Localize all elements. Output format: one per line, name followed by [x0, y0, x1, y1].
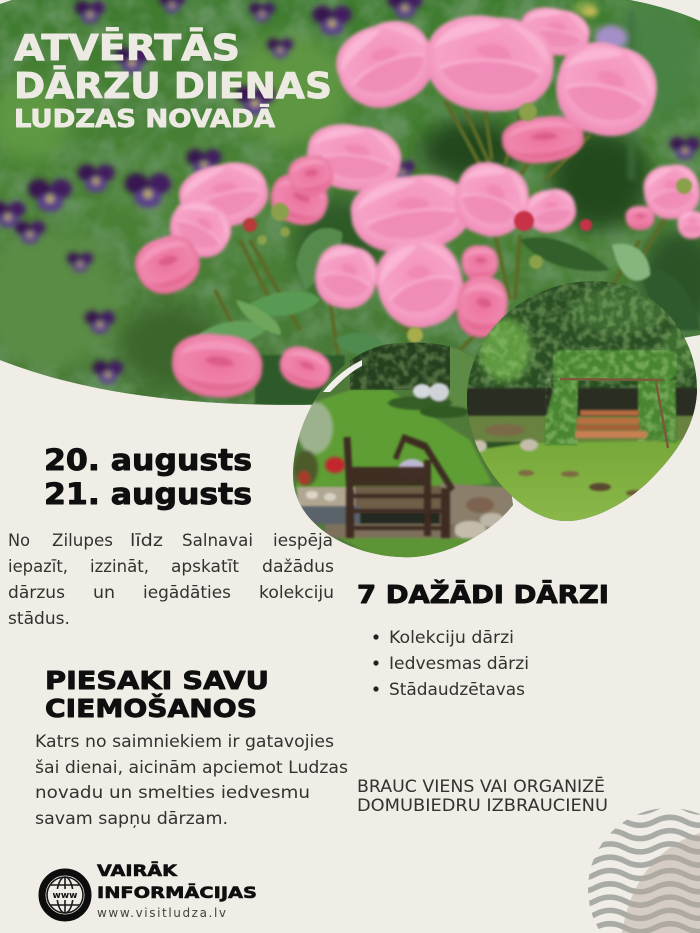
pink roses	[129, 3, 700, 401]
intro text: stādus.	[8, 609, 70, 629]
dates	[44, 443, 252, 511]
decorative wave circle	[565, 804, 700, 933]
rose stems	[215, 100, 670, 370]
garden types list: Iedvesmas dārzi	[389, 654, 529, 674]
heading: sign up for a visit	[45, 666, 269, 723]
dates: 21. augusts	[44, 477, 252, 511]
intro text: dārzus	[8, 583, 65, 603]
icon: globe www: www	[53, 891, 77, 901]
intro text: apskatīt	[171, 557, 239, 577]
travel note: BRAUC VIENS VAI ORGANIZĒ	[357, 775, 605, 797]
intro text: līdz	[130, 531, 163, 551]
trees	[479, 286, 700, 382]
pond	[465, 388, 700, 416]
intro text: No	[8, 531, 30, 551]
intro text: Salnavai	[182, 531, 253, 551]
garden types list	[373, 628, 529, 700]
title: LUDZAS NOVADĀ	[14, 104, 276, 133]
heading: sign up for a visit: CIEMOŠANOS	[45, 693, 257, 723]
rose leaves	[190, 228, 700, 405]
intro text	[8, 531, 334, 629]
arbor frame	[560, 379, 668, 448]
invitation text: Katrs no saimniekiem ir gatavojies	[35, 732, 334, 752]
intro text: iegādāties	[143, 583, 231, 603]
stones and earth patches	[471, 424, 644, 496]
footer contact text	[97, 860, 257, 920]
intro text: dažādus	[262, 557, 334, 577]
dates: 20. augusts	[44, 443, 252, 477]
white edge highlight	[323, 360, 362, 392]
heading: seven gardens: 7 DAŽĀDI DĀRZI	[357, 580, 609, 609]
footer contact text: INFORMĀCIJAS	[97, 882, 257, 902]
lawn	[295, 390, 492, 500]
heading: sign up for a visit: PIESAKI SAVU	[45, 666, 269, 695]
intro text: Zilupes	[52, 531, 113, 551]
invitation text	[35, 732, 348, 829]
top photo: pink roses and pansies	[0, 0, 700, 410]
footer contact text: www.visitludza.lv	[97, 906, 226, 920]
intro text: kolekciju	[259, 583, 334, 603]
arbor foliage	[545, 350, 677, 445]
travel note	[357, 775, 608, 816]
rose buds	[243, 103, 692, 343]
pond and rocks	[297, 483, 515, 560]
footer contact text: VAIRĀK	[97, 860, 178, 880]
intro text: un	[93, 583, 115, 603]
flower bed	[294, 402, 345, 486]
title: ATVĒRTĀS	[14, 27, 240, 69]
invitation text: novadu un smelties iedvesmu	[35, 783, 310, 803]
title: DĀRZU DIENAS	[14, 65, 332, 107]
icon: globe www	[42, 872, 88, 918]
travel note: DOMUBIEDRU IZBRAUCIENU	[357, 796, 608, 816]
petunias	[397, 458, 426, 469]
photo: garden with wooden bridge	[290, 340, 515, 560]
shrubs and white stones	[388, 383, 470, 418]
garden types list: Stādaudzētavas	[389, 680, 525, 700]
hedge behind lawn	[350, 340, 475, 415]
lawn	[478, 440, 682, 521]
intro text: izzināt,	[90, 557, 149, 577]
photo: green arbor with swing	[460, 275, 700, 525]
title	[14, 27, 332, 133]
intro text: iepazīt,	[8, 557, 68, 577]
intro text: iespēja	[273, 531, 333, 551]
rocks bank	[465, 416, 700, 442]
invitation text: savam sapņu dārzam.	[35, 809, 228, 829]
swing bench	[575, 410, 647, 438]
wooden bridge	[344, 434, 455, 538]
invitation text: šai dienai, aicinām apciemot Ludzas	[35, 758, 348, 778]
garden types list: Kolekciju dārzi	[389, 628, 514, 648]
